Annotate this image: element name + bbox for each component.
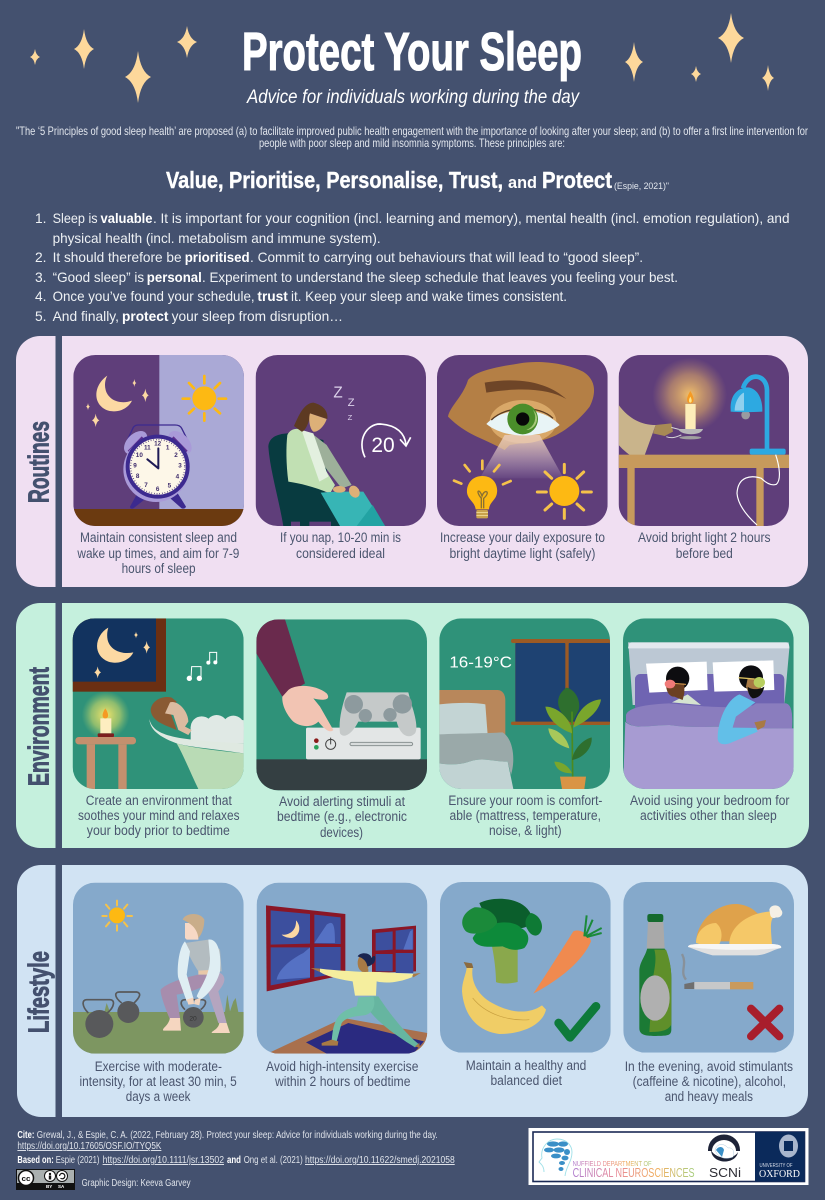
icon: clock, moon and sun: 6 <box>156 486 160 493</box>
logo: university of oxford: UNIVERSITY OF <box>760 1163 792 1169</box>
caption: high-intensity exercise <box>266 1059 418 1089</box>
icon: clock, moon and sun: 4 <box>176 474 180 481</box>
icon: hand switching off console <box>256 619 427 790</box>
citation text: https://doi.org/10.17605/OSF.IO/TYQ5K <box>17 1141 162 1152</box>
caption: maintain consistent sleep: Maintain consistent sleep and <box>80 530 237 545</box>
numbered principles list: protect <box>122 309 169 324</box>
numbered principles list: 1. <box>35 211 47 226</box>
logo: nuffield department <box>539 1139 695 1180</box>
citation text: Cite: <box>17 1130 34 1141</box>
icon: kettlebell exercise <box>73 883 244 1054</box>
caption: comfortable room: Ensure your room is comfort- <box>448 793 602 808</box>
caption: healthy diet: Maintain a healthy and <box>466 1058 586 1073</box>
design credit: Graphic Design: Keeva Garvey <box>82 1178 191 1189</box>
routines illustrations right <box>437 355 789 526</box>
icon: clock, moon and sun: 7 <box>144 482 148 489</box>
logo: nuffield department: NUFFIELD DEPARTMENT OF <box>573 1161 652 1168</box>
caption: nap length: If you nap, 10-20 min is <box>280 530 401 545</box>
icon: clock, moon and sun: 10 <box>136 452 143 459</box>
caption: bedroom use: activities other than sleep <box>640 808 777 823</box>
numbered principles list: . Experiment to understand the sleep schedule that leaves you feeling your best. <box>202 270 678 285</box>
icon: creative commons badge <box>16 1169 75 1190</box>
icon: clock, moon and sun: 9 <box>133 463 137 470</box>
caption: bedroom use <box>630 793 790 823</box>
decorative stars <box>30 13 774 103</box>
five principles heading: Protect <box>542 167 612 193</box>
caption: stimulants <box>625 1059 793 1104</box>
icon: creative commons badge: BY <box>46 1184 52 1189</box>
caption: soothing environment: your body prior to bedtime <box>87 823 230 838</box>
numbered principles list: your sleep from disruption… <box>172 309 343 324</box>
intro paragraph <box>16 124 808 150</box>
icon: clock, moon and sun: 3 <box>178 463 182 470</box>
caption: moderate exercise: intensity, for at least 30 min, 5 <box>80 1074 237 1089</box>
panel: lifestyle <box>17 865 808 1117</box>
caption: daylight exposure: bright daytime light (safely) <box>450 546 596 561</box>
numbered principles list: 5. <box>35 309 47 324</box>
caption: soothing environment: soothes your mind and relaxes <box>78 808 240 823</box>
caption: maintain consistent sleep: wake up times, and aim for 7-9 <box>77 546 239 561</box>
logos panel <box>528 1128 808 1185</box>
caption: moderate exercise <box>80 1059 237 1104</box>
caption: soothing environment: Create an environment that <box>86 793 232 808</box>
numbered principles list: Sleep is <box>53 211 98 226</box>
icon: clock, moon and sun: 11 <box>144 445 151 452</box>
caption: alerting stimuli <box>277 794 407 840</box>
icon: healthy food and tick <box>440 882 611 1053</box>
heading: lifestyle: Lifestyle <box>24 951 56 1033</box>
numbered principles list: It should therefore be <box>53 250 182 265</box>
caption: high-intensity exercise: within 2 hours of bedtime <box>274 1074 410 1089</box>
heading: routines: Routines <box>24 421 56 503</box>
icon: clock, moon and sun: 8 <box>136 473 140 480</box>
panel: environment <box>16 603 809 848</box>
logo: SCNi <box>708 1134 741 1180</box>
heading: environment: Environment <box>24 667 56 786</box>
citation text: and <box>227 1155 241 1166</box>
icon: bath with candle and music <box>73 618 252 789</box>
numbered principles list: “Good sleep” is <box>53 270 144 285</box>
numbered principles list: . It is important for your cognition (incl. learning and memory), mental health (incl. emotion regulation), and <box>153 211 790 226</box>
icon: candle and desk lamp <box>619 355 789 526</box>
icon: clock, moon and sun <box>73 355 244 526</box>
caption: high-intensity exercise: Avoid high-intensity exercise <box>266 1059 418 1074</box>
numbered principles list: it. Keep your sleep and wake times consistent. <box>291 289 567 304</box>
icon: napping person: Z <box>348 413 353 422</box>
caption: avoid bright light: before bed <box>676 546 733 561</box>
icon: bedroom with plant: 16-19°C <box>449 655 512 672</box>
caption: avoid bright light <box>638 530 771 561</box>
icon: couple sleeping in bed <box>623 618 794 789</box>
icon: clock, moon and sun: 5 <box>168 483 172 490</box>
numbered principles list: valuable <box>100 211 153 226</box>
icon: bedroom with plant <box>439 618 610 789</box>
numbered principles list: trust <box>257 289 288 304</box>
numbered principles list: physical health (incl. metabolism and immune system). <box>53 231 381 246</box>
icon: yoga at window <box>257 883 427 1054</box>
icon: bottle, cigarette and meal with cross <box>623 882 794 1053</box>
five principles heading: and <box>508 173 537 192</box>
numbered principles list: . Commit to carrying out behaviours that will lead to “good sleep”. <box>250 250 643 265</box>
caption: comfortable room <box>448 793 602 838</box>
icon: creative commons badge: SA <box>58 1184 65 1189</box>
five principles heading: (Espie, 2021)" <box>614 181 669 192</box>
caption: maintain consistent sleep <box>77 530 239 576</box>
citation text: https://doi.org/10.11622/smedj.2021058 <box>305 1155 455 1166</box>
icon: kettlebell exercise: 20 <box>189 1016 197 1023</box>
numbered principles list: Once you’ve found your schedule, <box>53 289 255 304</box>
caption: daylight exposure <box>440 530 605 561</box>
numbered principles list: 3. <box>35 270 47 285</box>
caption: daylight exposure: Increase your daily exposure to <box>440 530 605 545</box>
citation text: Espie (2021) <box>56 1155 100 1166</box>
icon: creative commons badge: cc <box>22 1174 30 1183</box>
panel: routines <box>16 336 808 587</box>
caption: avoid bright light: Avoid bright light 2 hours <box>638 530 771 545</box>
icon: eye and light sources <box>437 355 608 526</box>
citation text: Grewal, J., & Espie, C. A. (2022, February 28). Protect your sleep: Advice for individuals working during the day. <box>37 1130 438 1141</box>
icon: napping person <box>256 355 426 526</box>
routines illustrations left <box>73 355 426 526</box>
icon: clock, moon and sun: 1 <box>166 444 170 451</box>
icon: clock, moon and sun: 2 <box>174 452 178 459</box>
numbered principles list: personal <box>147 270 202 285</box>
caption: soothing environment <box>78 793 240 838</box>
icon: napping person: Z <box>348 397 355 409</box>
logo: university of oxford: OXFORD <box>759 1169 800 1180</box>
caption: bedroom use: Avoid using your bedroom for <box>630 793 790 808</box>
subtitle: Advice for individuals working during the day <box>246 87 580 108</box>
citation text: Ong et al. (2021) <box>244 1155 303 1166</box>
citation text <box>17 1130 455 1166</box>
caption: healthy diet: balanced diet <box>490 1073 562 1088</box>
caption: maintain consistent sleep: hours of sleep <box>122 561 196 576</box>
icon: clock, moon and sun: 12 <box>154 441 162 448</box>
numbered principles list: prioritised <box>185 250 250 265</box>
numbered principles list <box>35 211 790 324</box>
caption: healthy diet <box>466 1058 586 1088</box>
caption: stimulants: In the evening, avoid stimulants <box>625 1059 793 1074</box>
caption: moderate exercise: days a week <box>126 1089 191 1104</box>
caption: moderate exercise: Exercise with moderate- <box>95 1059 222 1074</box>
icon: napping person: Z <box>333 385 343 402</box>
caption: nap length: considered ideal <box>296 546 385 561</box>
intro paragraph: people with poor sleep and mild insomnia symptoms. These principles are: <box>259 136 565 150</box>
five principles heading: Value, Prioritise, Personalise, Trust, <box>166 167 503 193</box>
caption: nap length <box>280 530 401 561</box>
environment illustrations right <box>439 618 794 789</box>
numbered principles list: 2. <box>35 250 47 265</box>
logo: university of oxford <box>755 1132 804 1182</box>
logo: SCNi: SCNi <box>709 1165 741 1180</box>
lifestyle illustrations left <box>73 883 427 1054</box>
numbered principles list: And finally, <box>53 309 119 324</box>
citation text: https://doi.org/10.1111/jsr.13502 <box>103 1155 224 1166</box>
title: Protect Your Sleep <box>242 22 582 82</box>
caption: comfortable room: able (mattress, temperature, <box>450 808 601 823</box>
environment illustrations left <box>73 618 427 790</box>
lifestyle illustrations right <box>440 882 794 1053</box>
caption: stimulants: (caffeine & nicotine), alcohol, <box>633 1074 786 1089</box>
caption: alerting stimuli: bedtime (e.g., electronic <box>277 809 407 824</box>
caption: alerting stimuli: devices) <box>320 825 363 840</box>
caption: alerting stimuli: Avoid alerting stimuli at <box>279 794 405 809</box>
caption: stimulants: and heavy meals <box>665 1089 753 1104</box>
caption: comfortable room: noise, & light) <box>489 823 562 838</box>
icon: napping person: 20 <box>371 433 395 457</box>
numbered principles list: 4. <box>35 289 47 304</box>
citation text: Based on: <box>17 1155 54 1166</box>
logo: nuffield department: CLINICAL NEUROSCIENCES <box>573 1166 695 1180</box>
